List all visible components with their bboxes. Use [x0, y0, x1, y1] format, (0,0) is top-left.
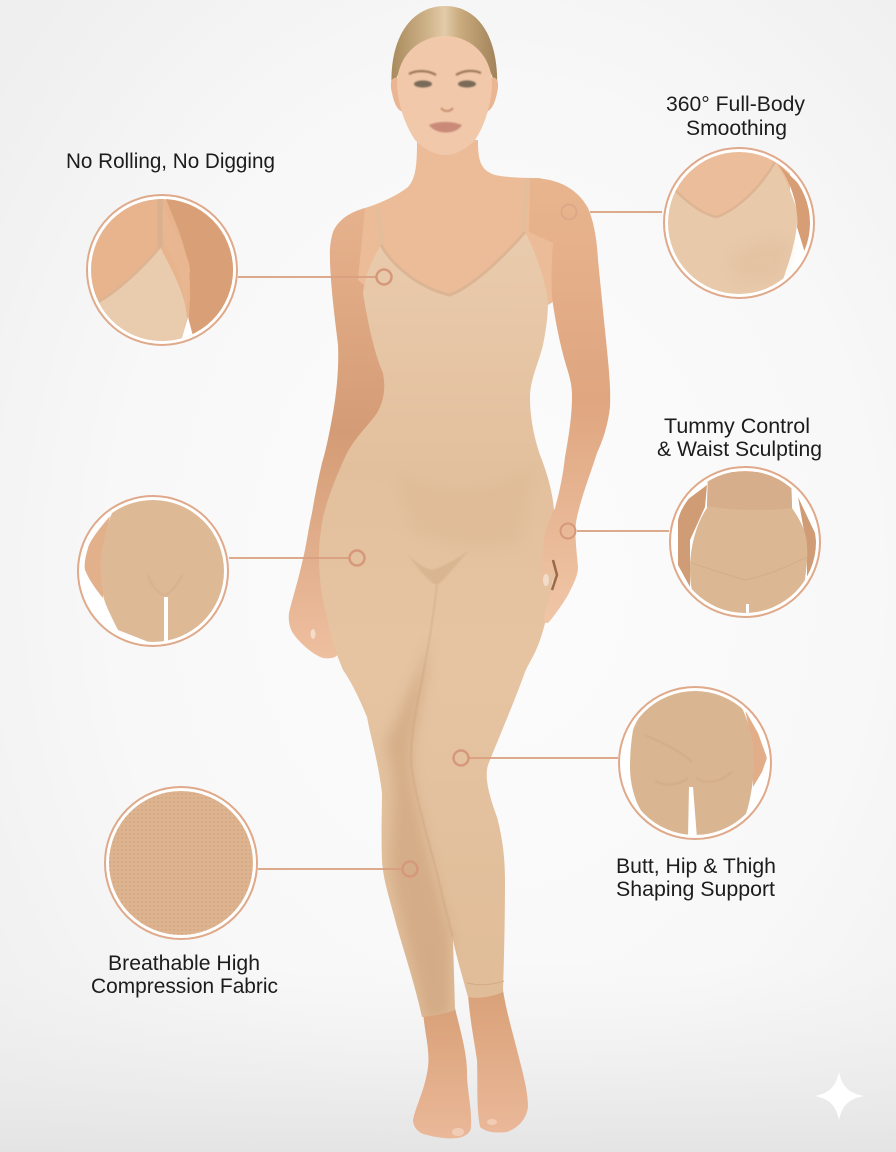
heading: 360° Full-Body — [666, 93, 806, 116]
inset circle — [85, 195, 240, 345]
callout: 360 smoothing — [562, 93, 815, 300]
connector — [238, 270, 392, 284]
model: straps — [378, 178, 527, 245]
heading: & Waist Sculpting — [657, 438, 822, 461]
model figure — [289, 6, 610, 1138]
connector — [229, 550, 364, 566]
model: facial features — [409, 71, 481, 132]
inset circle — [105, 787, 257, 939]
heading: No Rolling, No Digging — [66, 150, 275, 173]
model: right arm — [529, 178, 610, 623]
heading: Compression Fabric — [91, 975, 278, 998]
inset circle — [78, 495, 230, 648]
model: hair — [392, 6, 497, 92]
model: bodysuit — [319, 232, 556, 1017]
callout: no rolling — [66, 150, 392, 345]
heading — [616, 855, 776, 901]
model: neck and chest — [358, 140, 556, 305]
model: feet — [413, 990, 528, 1138]
callout: tummy control — [560, 415, 822, 617]
heading: Butt, Hip & Thigh — [616, 855, 776, 878]
model: ears — [391, 77, 498, 112]
callout: hip inset — [78, 495, 364, 648]
model: face — [397, 36, 492, 155]
heading: Breathable High — [108, 952, 260, 975]
inset circle — [664, 148, 815, 300]
model: leg hem — [467, 981, 504, 985]
icon: sparkle — [815, 1072, 864, 1120]
heading — [657, 415, 822, 461]
heading: Tummy Control — [664, 415, 810, 438]
inset circle — [670, 465, 820, 617]
callout: breathable fabric — [91, 787, 418, 998]
model: finger details — [310, 560, 557, 639]
model: suit shading — [384, 553, 466, 1016]
connector — [258, 862, 418, 876]
inset circle — [619, 687, 771, 839]
connector — [562, 204, 662, 220]
heading — [666, 93, 806, 140]
heading: Shaping Support — [616, 878, 775, 901]
connector — [454, 750, 618, 766]
model: left arm — [289, 208, 400, 658]
model: neckline — [381, 232, 525, 295]
callout: butt hip thigh — [454, 687, 776, 901]
heading: Smoothing — [686, 117, 787, 140]
connector — [560, 524, 669, 538]
heading — [91, 952, 278, 998]
